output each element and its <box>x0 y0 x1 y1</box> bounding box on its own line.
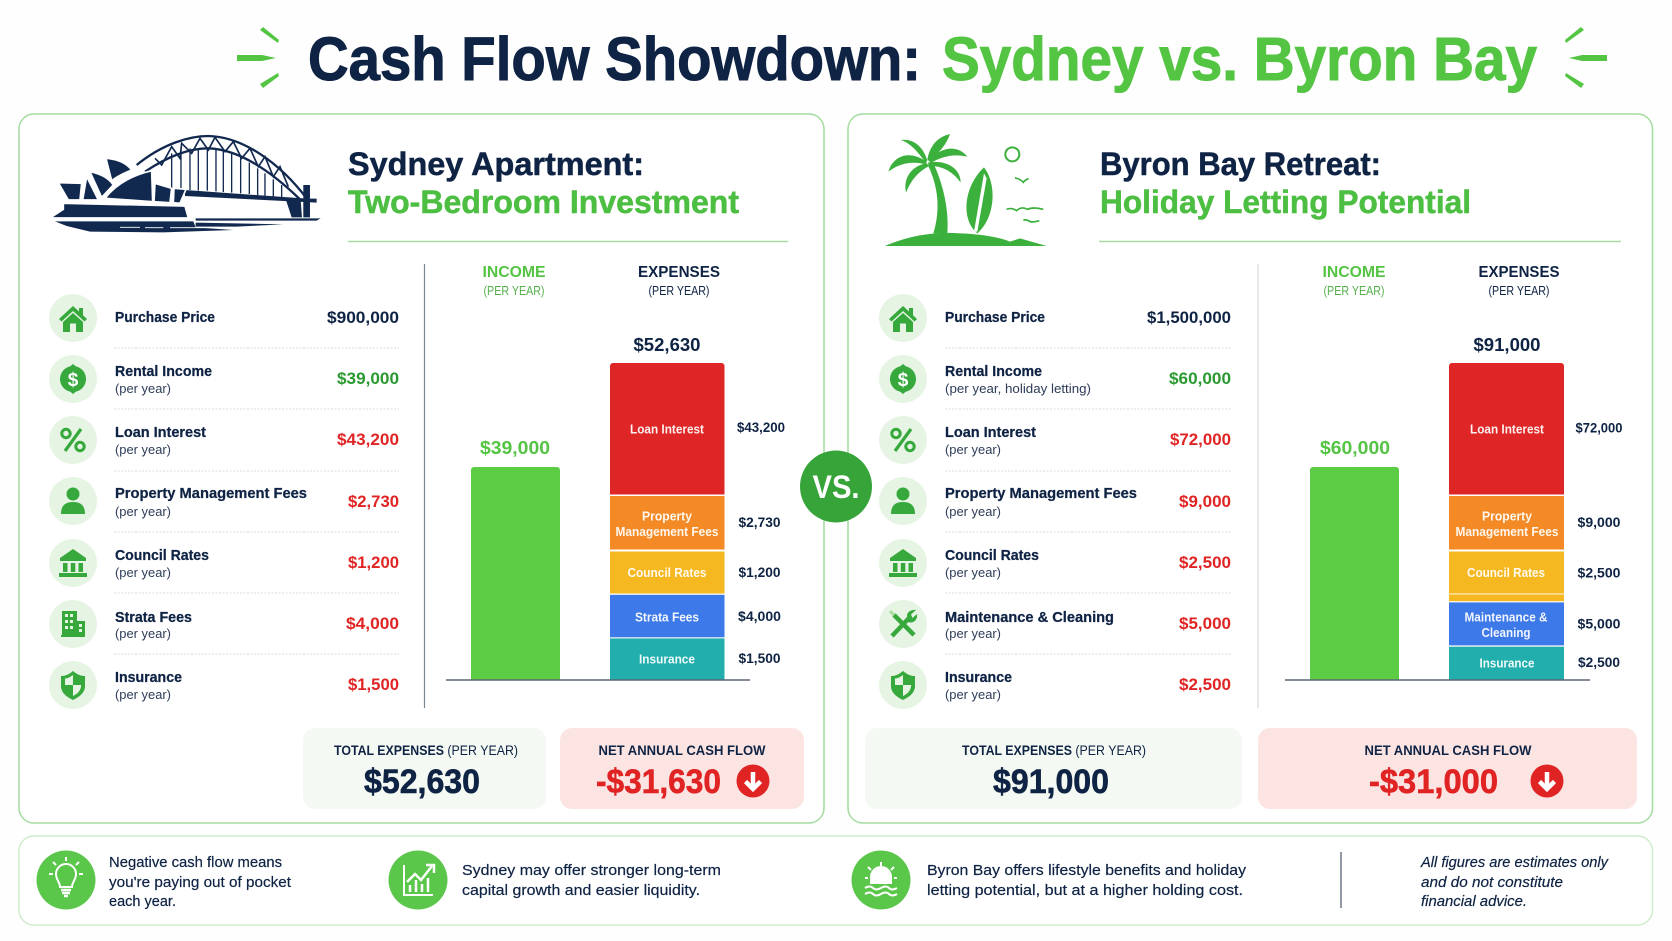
callout: net annual cash flow: NET ANNUAL CASH FLOW <box>598 742 766 758</box>
row: strata fees: (per year) <box>115 626 171 641</box>
row: maintenance and cleaning: Maintenance & Cleaning <box>945 609 1114 626</box>
row: maintenance and cleaning <box>879 600 1231 648</box>
icon: growth chart <box>404 865 434 895</box>
labels: expense values: $2,730 <box>738 514 781 530</box>
callout: total expenses <box>865 728 1242 809</box>
badge: VS. <box>800 450 872 522</box>
icon: left title sparks <box>237 27 279 88</box>
bar chart: Byron Bay income vs expenses: (PER YEAR) <box>1488 283 1550 298</box>
disclaimer: financial advice. <box>1421 893 1527 910</box>
callout: total expenses: $91,000 <box>993 763 1109 801</box>
row: purchase price: $1,500,000 <box>1147 308 1231 327</box>
callout: total expenses: TOTAL EXPENSES (PER YEAR) <box>334 742 518 758</box>
bar chart: Sydney income vs expenses: (PER YEAR) <box>484 283 544 298</box>
callout: total expenses: $52,630 <box>364 763 480 801</box>
bar: income <box>471 467 560 680</box>
callout: net annual cash flow: -$31,630 <box>596 763 721 801</box>
row: insurance: $1,500 <box>348 675 399 694</box>
takeaway: Byron Bay lifestyle: Byron Bay offers lifestyle benefits and holiday <box>927 862 1247 879</box>
takeaway: negative cash flow: each year. <box>109 893 176 910</box>
labels: expense values: $4,000 <box>738 608 781 624</box>
list: Sydney figures <box>49 294 399 709</box>
bar chart: Sydney income vs expenses: $52,630 <box>634 335 700 355</box>
row: strata fees: Strata Fees <box>115 609 192 626</box>
row: loan interest: Loan Interest <box>115 424 206 441</box>
row: insurance <box>49 661 399 709</box>
bar chart: Sydney income vs expenses <box>446 264 785 680</box>
badge: VS.: VS. <box>812 469 860 505</box>
bar: expenses stack: Cleaning <box>1482 626 1530 640</box>
row: insurance: (per year) <box>115 687 171 702</box>
labels: expense values <box>737 419 785 666</box>
bar: income <box>1310 467 1399 680</box>
heading: Byron Bay retreat: Holiday Letting Potential <box>1100 184 1471 220</box>
row: council rates: (per year) <box>115 565 171 580</box>
labels: expense values: $43,200 <box>737 419 785 435</box>
takeaway: Byron Bay lifestyle <box>852 850 1247 910</box>
icon: palm tree island <box>885 134 1047 246</box>
row: purchase price <box>879 294 1231 342</box>
bar: expenses stack: Management Fees <box>616 525 719 539</box>
callout: net annual cash flow <box>1258 728 1637 809</box>
row: rental income: (per year) <box>115 381 171 396</box>
title <box>308 25 1537 93</box>
labels: expense values <box>1576 420 1623 670</box>
takeaway: negative cash flow: Negative cash flow means <box>109 854 282 871</box>
labels: expense values: $1,500 <box>738 650 781 666</box>
row: property management fees: $2,730 <box>348 492 399 511</box>
row: purchase price <box>49 294 399 342</box>
heading: Byron Bay retreat: Byron Bay Retreat: <box>1100 146 1381 182</box>
bar chart: Byron Bay income vs expenses: INCOME <box>1322 264 1386 281</box>
labels: expense values: $5,000 <box>1578 616 1621 632</box>
row: purchase price: Purchase Price <box>945 309 1045 326</box>
row: maintenance and cleaning: (per year) <box>945 626 1001 641</box>
row: strata fees: $4,000 <box>346 614 399 633</box>
labels: expense values: $1,200 <box>738 564 781 580</box>
bar chart: Byron Bay income vs expenses: EXPENSES <box>1478 264 1560 281</box>
bar chart: Sydney income vs expenses: (PER YEAR) <box>648 283 710 298</box>
disclaimer: and do not constitute <box>1421 874 1563 891</box>
callout: net annual cash flow: -$31,000 <box>1369 763 1498 801</box>
row: rental income: $60,000 <box>1169 369 1231 388</box>
takeaway: Byron Bay lifestyle: letting potential, but at a higher holding cost. <box>927 882 1243 899</box>
row: loan interest: $72,000 <box>1170 430 1231 449</box>
icon: right title sparks <box>1565 27 1607 88</box>
row: council rates <box>879 539 1231 587</box>
row: rental income: Rental Income <box>945 363 1042 380</box>
bar chart: Byron Bay income vs expenses: $60,000 <box>1320 438 1390 458</box>
heading: Sydney apartment: Sydney Apartment: <box>348 146 644 182</box>
callout: net annual cash flow: NET ANNUAL CASH FLOW <box>1364 742 1532 758</box>
row: loan interest <box>879 416 1231 464</box>
bar chart: Sydney income vs expenses: $39,000 <box>480 438 550 458</box>
row: property management fees: (per year) <box>945 504 1001 519</box>
labels: expense values: $9,000 <box>1578 514 1621 530</box>
row: purchase price: Purchase Price <box>115 309 215 326</box>
bar: expenses stack: Council Rates <box>1467 566 1545 580</box>
row: property management fees <box>49 477 399 525</box>
takeaway: Sydney growth: capital growth and easier liquidity. <box>462 882 700 899</box>
bar chart: Byron Bay income vs expenses: (PER YEAR) <box>1324 283 1384 298</box>
panel: Sydney apartment <box>19 114 824 823</box>
row: council rates <box>49 539 399 587</box>
bar: expenses stack: Insurance <box>639 652 695 666</box>
bar: expenses stack: Strata Fees <box>635 610 699 624</box>
row: property management fees: Property Management Fees <box>115 485 307 502</box>
bar chart: Byron Bay income vs expenses: $91,000 <box>1474 335 1540 355</box>
row: council rates: $2,500 <box>1179 553 1231 572</box>
row: insurance: $2,500 <box>1179 675 1231 694</box>
row: rental income: (per year, holiday letting) <box>945 381 1091 396</box>
bar: expenses stack: Property <box>1482 510 1532 524</box>
row: property management fees: $9,000 <box>1179 492 1231 511</box>
row: insurance <box>879 661 1231 709</box>
takeaway: Sydney growth <box>388 850 721 910</box>
bar: expenses stack <box>1449 363 1564 680</box>
panel: Byron Bay retreat <box>848 114 1652 823</box>
takeaway: Sydney growth: Sydney may offer stronger long-term <box>462 862 721 879</box>
callout: total expenses: TOTAL EXPENSES (PER YEAR) <box>962 742 1146 758</box>
row: rental income <box>49 355 399 403</box>
takeaway: negative cash flow <box>36 850 292 910</box>
row: purchase price: $900,000 <box>327 308 399 327</box>
icon: Sydney Opera House and Harbour Bridge <box>50 136 321 232</box>
row: property management fees: (per year) <box>115 504 171 519</box>
row: loan interest: Loan Interest <box>945 424 1036 441</box>
bar chart: Sydney income vs expenses: INCOME <box>482 264 546 281</box>
bar: expenses stack: Property <box>642 510 692 524</box>
row: council rates: (per year) <box>945 565 1001 580</box>
list: Byron Bay figures <box>879 294 1232 709</box>
callout: total expenses <box>303 728 546 809</box>
callout: net annual cash flow <box>560 728 804 809</box>
heading: Byron Bay retreat <box>1100 146 1471 220</box>
row: strata fees <box>49 600 399 648</box>
bar: expenses stack: Maintenance & <box>1464 610 1548 624</box>
row: council rates: Council Rates <box>115 547 209 564</box>
bar: expenses stack: Council Rates <box>628 566 707 580</box>
bar chart: Sydney income vs expenses: EXPENSES <box>638 264 720 281</box>
labels: expense values: $2,500 <box>1578 654 1620 670</box>
takeaway: negative cash flow: you're paying out of pocket <box>109 874 292 891</box>
bar: expenses stack: Management Fees <box>1456 525 1559 539</box>
bar chart: Byron Bay income vs expenses <box>1285 264 1623 680</box>
heading: Sydney apartment <box>348 146 739 220</box>
row: council rates: Council Rates <box>945 547 1039 564</box>
row: loan interest <box>49 416 399 464</box>
disclaimer: All figures are estimates only <box>1420 854 1609 871</box>
row: loan interest: $43,200 <box>337 430 399 449</box>
row: insurance: Insurance <box>115 669 182 686</box>
row: insurance: (per year) <box>945 687 1001 702</box>
labels: expense values: $72,000 <box>1576 420 1623 436</box>
panel: takeaways footer <box>19 836 1652 925</box>
row: property management fees <box>879 477 1231 525</box>
icon: light bulb <box>49 857 83 896</box>
row: rental income <box>879 355 1231 403</box>
title: Cash Flow Showdown: <box>308 25 921 93</box>
bar: expenses stack: Loan Interest <box>630 422 705 436</box>
row: insurance: Insurance <box>945 669 1012 686</box>
row: loan interest: (per year) <box>945 442 1001 457</box>
heading: Sydney apartment: Two-Bedroom Investment <box>348 184 739 220</box>
row: rental income: $39,000 <box>337 369 399 388</box>
labels: expense values: $2,500 <box>1578 564 1621 580</box>
bar: expenses stack <box>610 363 724 680</box>
icon: sun over waves <box>865 862 897 896</box>
row: maintenance and cleaning: $5,000 <box>1179 614 1231 633</box>
row: loan interest: (per year) <box>115 442 171 457</box>
row: rental income: Rental Income <box>115 363 212 380</box>
title: Sydney vs. Byron Bay <box>942 25 1537 93</box>
bar: expenses stack: Loan Interest <box>1470 422 1545 436</box>
row: property management fees: Property Management Fees <box>945 485 1137 502</box>
row: council rates: $1,200 <box>348 553 399 572</box>
disclaimer <box>1420 854 1609 910</box>
bar: expenses stack: Insurance <box>1480 656 1535 670</box>
